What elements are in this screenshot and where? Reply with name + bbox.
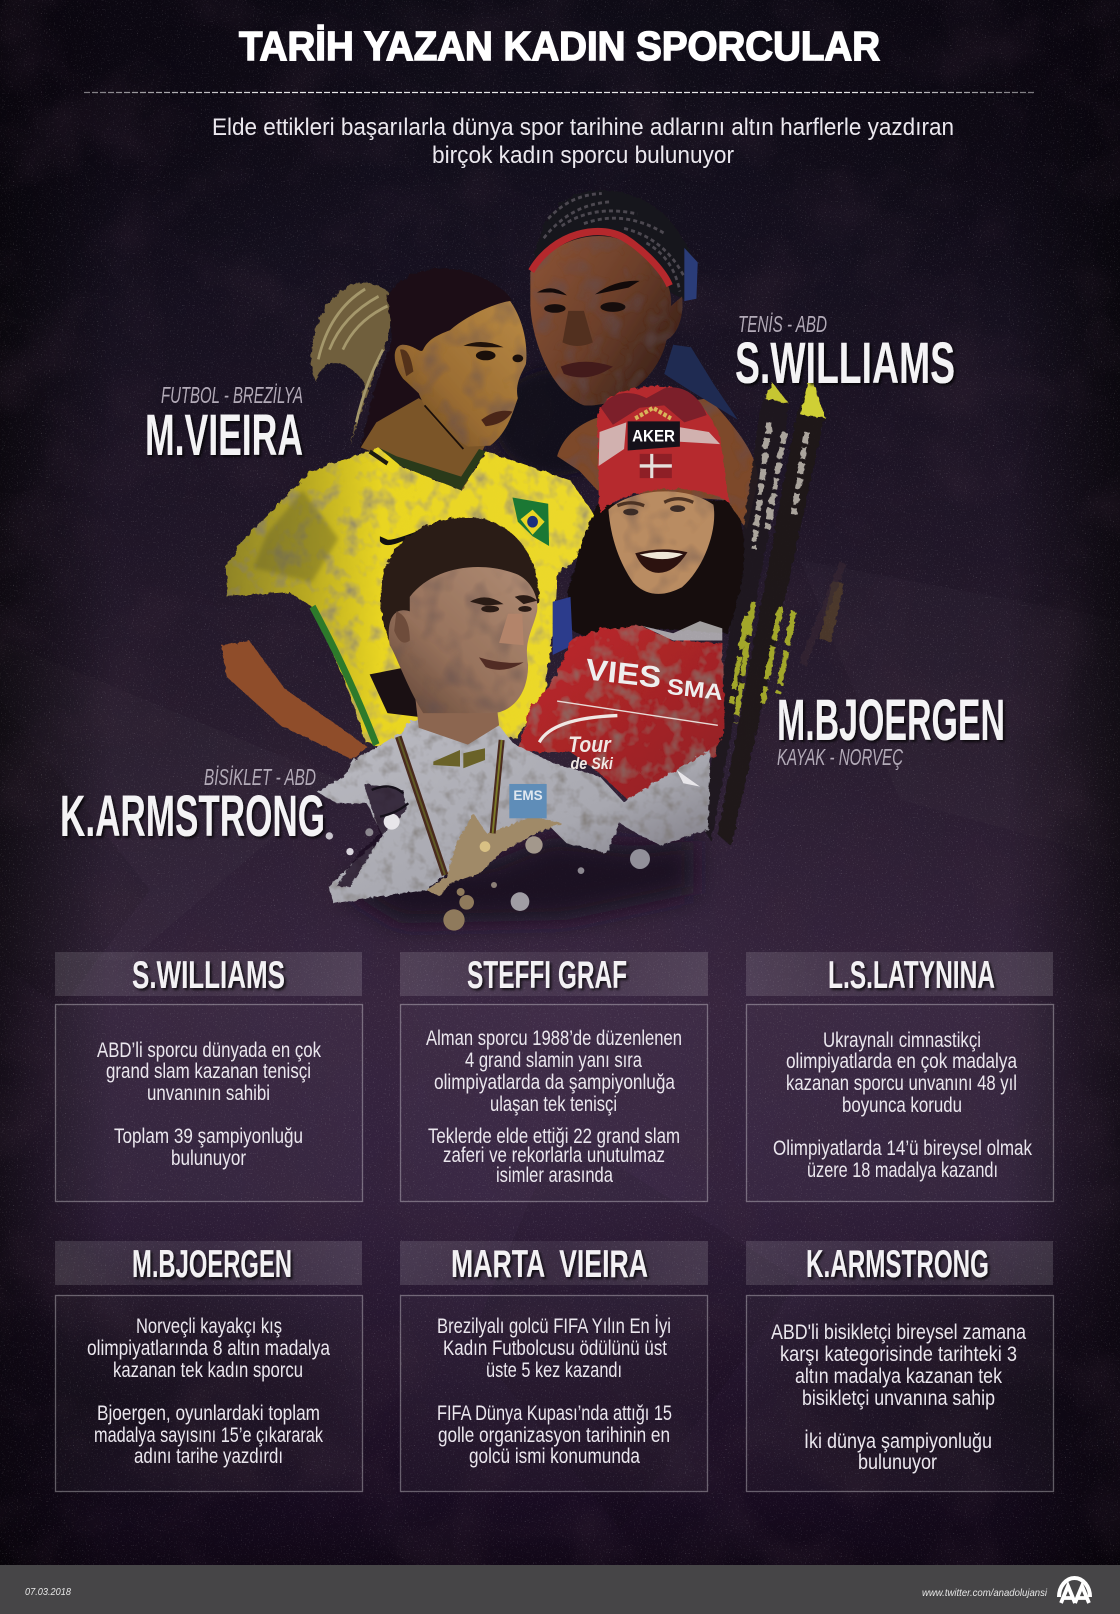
skis <box>702 374 843 846</box>
panel: S.Williams <box>55 952 362 1202</box>
portrait: M.Bjoergen: de Ski <box>571 755 613 773</box>
panel: L.S.Latynina: üzere 18 madalya kazandı <box>807 1159 998 1182</box>
jersey: EMS <box>513 787 543 803</box>
panel: L.S.Latynina: boyunca korudu <box>842 1094 962 1117</box>
source url: www.twitter.com/anadolujansi <box>922 1587 1048 1599</box>
label: S.Williams: S.WILLIAMS <box>735 331 955 396</box>
athlete collage <box>221 190 843 931</box>
panel: M.Bjoergen: olimpiyatlarında 8 altın madalya <box>87 1337 330 1360</box>
label: K.Armstrong: K.ARMSTRONG <box>60 784 325 849</box>
panel: L.S.Latynina: Ukraynalı cimnastikçi <box>823 1029 981 1052</box>
panel: Steffi Graf: STEFFI GRAF <box>467 954 627 997</box>
panel: K.Armstrong: K.ARMSTRONG <box>806 1243 989 1286</box>
panel: M.Bjoergen: Bjoergen, oyunlardaki toplam <box>97 1402 320 1425</box>
panel: Steffi Graf: olimpiyatlarda da şampiyonluğa <box>434 1071 675 1094</box>
portrait: M.Bjoergen: AKER <box>632 428 676 446</box>
panel: Steffi Graf: isimler arasında <box>496 1164 613 1187</box>
panel: Steffi Graf: zaferi ve rekorlarla unutulmaz <box>443 1144 665 1167</box>
panel: K.Armstrong: bulunuyor <box>858 1451 937 1474</box>
footer bar <box>0 1565 1120 1614</box>
panel: K.Armstrong: altın madalya kazanan tek <box>795 1365 1002 1388</box>
panel: Marta Vieira <box>400 1241 708 1492</box>
panel: M.Bjoergen: adını tarihe yazdırdı <box>134 1445 283 1468</box>
label: S.Williams <box>735 311 955 396</box>
panel: M.Bjoergen <box>55 1241 362 1492</box>
title: TARİH YAZAN KADIN SPORCULAR <box>239 23 880 69</box>
panel: S.Williams: S.WILLIAMS <box>132 954 285 997</box>
panel: K.Armstrong: karşı kategorisinde tarihteki 3 <box>780 1343 1017 1366</box>
panel: K.Armstrong: ABD'li bisikletçi bireysel zamana <box>771 1321 1026 1344</box>
label: S.Williams: TENİS - ABD <box>738 311 827 337</box>
panel: L.S.Latynina <box>746 952 1054 1202</box>
label: K.Armstrong: BİSİKLET - ABD <box>204 764 316 790</box>
intro text <box>212 114 954 169</box>
panel: M.Bjoergen: madalya sayısını 15’e çıkararak <box>94 1424 323 1447</box>
label: M.Vieira <box>145 382 303 468</box>
panel: Marta Vieira: FIFA Dünya Kupası’nda attığı 15 <box>437 1402 672 1425</box>
portrait: M.Bjoergen: Tour <box>568 732 612 757</box>
panel: Marta Vieira: MARTA VIEIRA <box>451 1243 648 1286</box>
panel: K.Armstrong: bisikletçi unvanına sahip <box>802 1387 995 1410</box>
portrait: M.Bjoergen <box>517 386 744 800</box>
portrait: K.Armstrong <box>317 517 710 931</box>
jersey <box>317 720 710 931</box>
panel: Steffi Graf: Teklerde elde ettiği 22 grand slam <box>428 1125 680 1148</box>
intro text: Elde ettikleri başarılarla dünya spor tarihine adlarını altın harflerle yazdıran <box>212 114 954 141</box>
panel: S.Williams: grand slam kazanan tenisçi <box>106 1060 311 1083</box>
label: M.Vieira: M.VIEIRA <box>145 403 303 468</box>
panel: Marta Vieira: golle organizasyon tarihinin en <box>438 1424 670 1447</box>
panel: Steffi Graf: Alman sporcu 1988’de düzenlenen <box>426 1027 682 1050</box>
panel: L.S.Latynina: kazanan sporcu unvanını 48 yıl <box>786 1072 1017 1095</box>
panel: S.Williams: ABD’li sporcu dünyada en çok <box>97 1039 321 1062</box>
portrait: M.Vieira <box>226 268 597 746</box>
intro text: birçok kadın sporcu bulunuyor <box>432 142 734 169</box>
panel: K.Armstrong: İki dünya şampiyonluğu <box>804 1430 992 1453</box>
label: M.Vieira: FUTBOL - BREZİLYA <box>161 382 303 408</box>
date: 07.03.2018 <box>25 1587 71 1598</box>
panel: Marta Vieira: Kadın Futbolcusu ödülünü üst <box>443 1337 667 1360</box>
panel: Marta Vieira: üste 5 kez kazandı <box>486 1359 622 1382</box>
panel: L.S.Latynina: olimpiyatlarda en çok madalya <box>786 1050 1017 1073</box>
panel: Marta Vieira: Brezilyalı golcü FIFA Yılın En İyi <box>437 1315 671 1338</box>
panel: M.Bjoergen: M.BJOERGEN <box>132 1243 292 1286</box>
panel: L.S.Latynina: L.S.LATYNINA <box>828 954 995 997</box>
arm strip <box>221 640 367 759</box>
panel: Marta Vieira: golcü ismi konumunda <box>469 1445 640 1468</box>
panel: S.Williams: bulunuyor <box>171 1147 246 1170</box>
panel: S.Williams: Toplam 39 şampiyonluğu <box>114 1125 303 1148</box>
icon: AA logo <box>1059 1578 1090 1603</box>
label: K.Armstrong <box>60 764 325 849</box>
panel: Steffi Graf <box>400 952 708 1202</box>
panel: Steffi Graf: 4 grand slamin yanı sıra <box>465 1049 642 1072</box>
portrait: S.Williams <box>495 190 758 529</box>
panel: L.S.Latynina: Olimpiyatlarda 14’ü bireysel olmak <box>773 1137 1032 1160</box>
panel: K.Armstrong <box>746 1241 1054 1492</box>
panel: M.Bjoergen: Norveçli kayakçı kış <box>136 1315 282 1338</box>
panel: S.Williams: unvanının sahibi <box>147 1082 270 1105</box>
portrait: M.Bjoergen: VIES <box>584 653 663 695</box>
label: M.Bjoergen: KAYAK - NORVEÇ <box>777 744 903 770</box>
panel: M.Bjoergen: kazanan tek kadın sporcu <box>113 1359 303 1382</box>
label: M.Bjoergen <box>777 688 1005 770</box>
panel: Steffi Graf: ulaşan tek tenisçi <box>490 1093 617 1116</box>
portrait: M.Bjoergen: SMA <box>666 674 724 705</box>
